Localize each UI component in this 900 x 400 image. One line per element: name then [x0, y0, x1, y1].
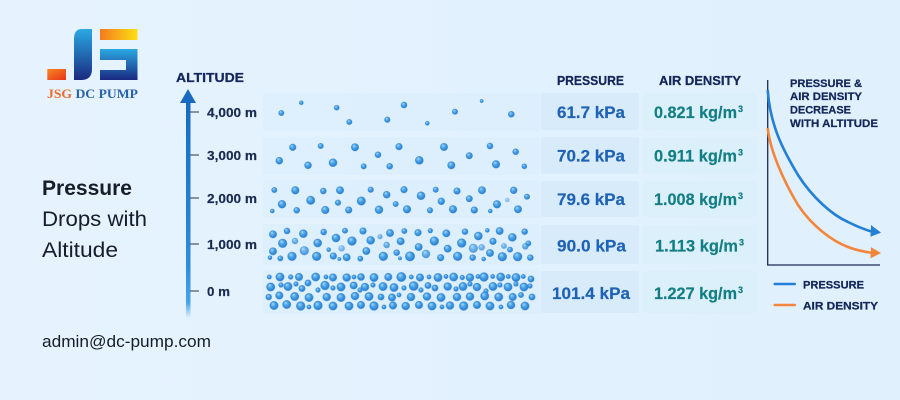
air molecules at 4,000 m [279, 99, 514, 125]
chart title: AIR DENSITY [790, 91, 863, 103]
air density column cells: 3 [739, 238, 744, 248]
air density column cells: 0.911 kg/m [654, 148, 737, 166]
air density column heading: AIR DENSITY [659, 74, 742, 88]
chart title: DECREASE [790, 104, 851, 116]
pressure column cells: 70.2 kPa [557, 148, 626, 166]
pressure column heading: PRESSURE [557, 74, 624, 88]
air density column cells: 0.821 kg/m [654, 104, 737, 122]
air density column cells [643, 93, 757, 313]
left heading: Pressure Drops with Altitude: Drops with [42, 208, 147, 231]
air density column cells: 3 [738, 148, 743, 158]
air molecules at 3,000 m [276, 143, 527, 169]
logo: JSG DC PUMP [47, 29, 138, 101]
chart legend [774, 280, 879, 312]
pressure column cells [541, 93, 639, 313]
air density column cells: 1.113 kg/m [655, 238, 738, 256]
left heading: Pressure Drops with Altitude: Pressure [42, 177, 132, 200]
line chart: pressure and air density decrease [768, 80, 880, 265]
pressure column cells: 90.0 kPa [557, 238, 627, 256]
altitude labels [207, 105, 257, 299]
air molecules at 1,000 m [268, 227, 533, 261]
pressure column cells: 101.4 kPa [552, 285, 631, 303]
air density column cells: 3 [738, 191, 743, 201]
air molecules at 0 m [266, 272, 535, 310]
contact email: admin@dc-pump.com [42, 332, 211, 351]
chart title: PRESSURE & [790, 78, 862, 90]
altitude labels: 2,000 m [207, 191, 257, 206]
chart legend: PRESSURE [803, 280, 864, 292]
pressure column cells: 79.6 kPa [557, 191, 626, 209]
left heading: Pressure Drops with Altitude: Altitude [42, 239, 118, 262]
logo: JSG DC PUMP: JSG DC PUMP [47, 87, 138, 101]
air density column cells: 1.008 kg/m [654, 191, 737, 209]
altitude labels: 1,000 m [207, 237, 257, 252]
altitude labels: 3,000 m [207, 148, 257, 163]
air density column cells: 1.227 kg/m [654, 285, 737, 303]
altitude labels: 4,000 m [207, 105, 257, 120]
air bands background [263, 93, 540, 314]
chart legend: AIR DENSITY [803, 300, 879, 312]
chart title: WITH ALTITUDE [790, 118, 878, 130]
altitude arrow with ticks [180, 89, 199, 318]
air density column cells: 3 [738, 285, 743, 295]
pressure column cells: 61.7 kPa [557, 104, 626, 122]
left heading: Pressure Drops with Altitude [42, 177, 147, 262]
altitude labels: 0 m [207, 284, 230, 299]
air molecules at 2,000 m [270, 186, 530, 214]
altitude heading: ALTITUDE [176, 70, 244, 85]
air density column cells: 3 [738, 104, 743, 114]
chart title [790, 78, 878, 130]
